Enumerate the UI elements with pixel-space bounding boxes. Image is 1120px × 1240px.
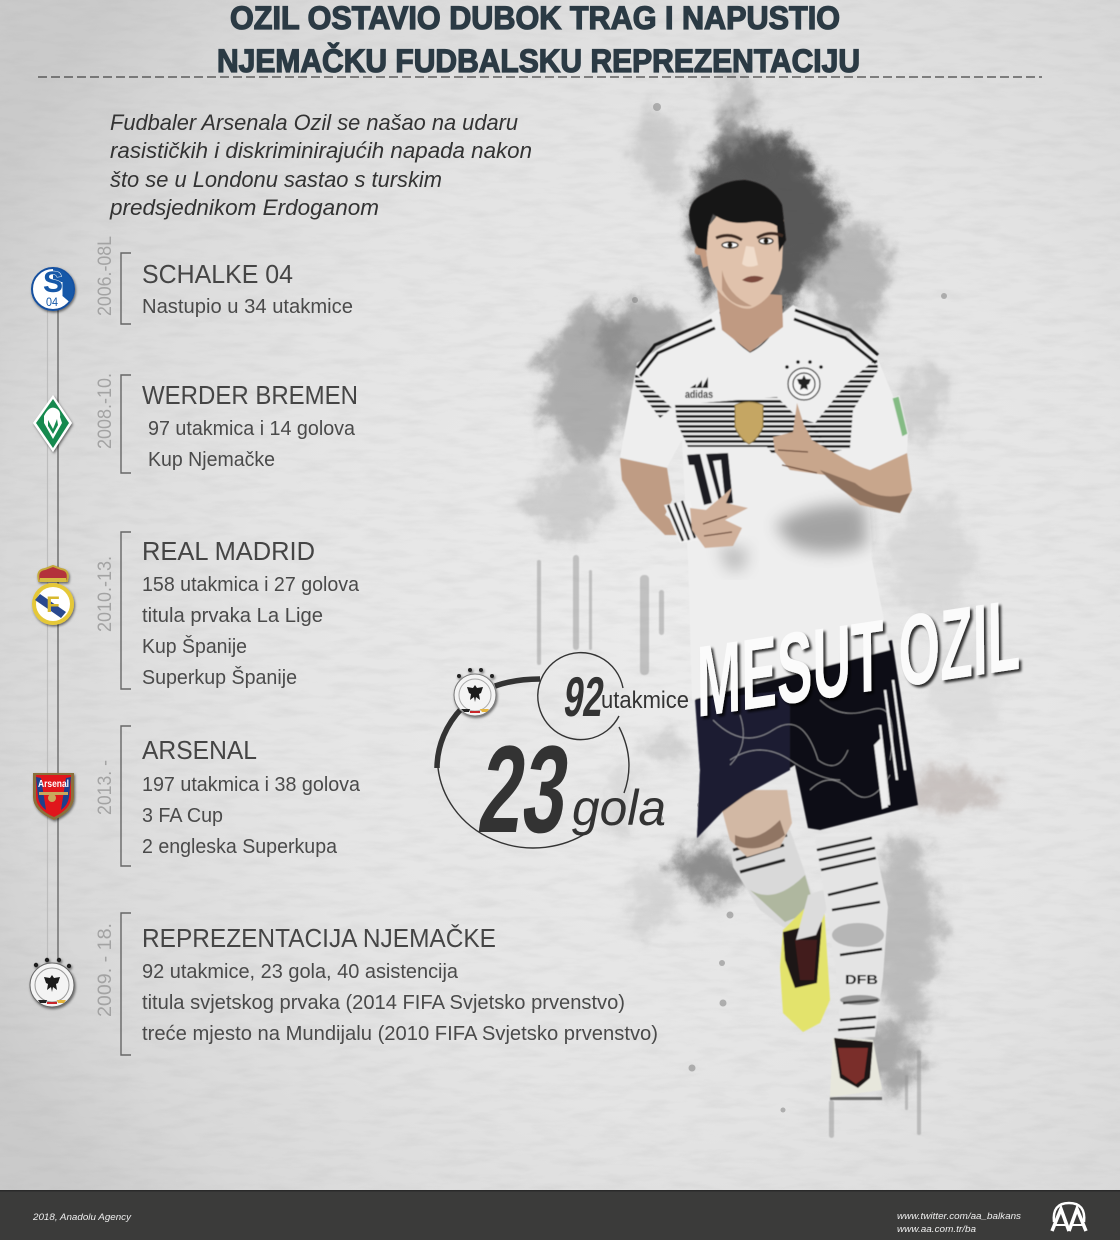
club: Werder Bremen: WERDER BREMEN bbox=[142, 380, 358, 410]
intro text: rasističkih i diskriminirajućih napada nakon bbox=[110, 138, 532, 163]
national team: Germany bbox=[95, 913, 658, 1055]
club: Real Madrid: 2010.-13. bbox=[95, 556, 116, 632]
yellow boot bbox=[780, 890, 830, 1032]
shorts bbox=[695, 640, 918, 838]
player illustration bbox=[620, 180, 918, 1100]
club: Real Madrid: Superkup Španije bbox=[142, 666, 297, 689]
club: Real Madrid: REAL MADRID bbox=[142, 536, 315, 566]
intro text: Fudbaler Arsenala Ozil se našao na udaru bbox=[110, 110, 518, 135]
club: Arsenal: ARSENAL bbox=[142, 735, 257, 765]
timeline rails bbox=[48, 300, 58, 960]
club: Real Madrid: Kup Španije bbox=[142, 635, 247, 658]
title bbox=[217, 0, 860, 79]
torso shading bbox=[718, 504, 867, 570]
left arm and wristband bbox=[620, 458, 748, 548]
icon: Arsenal crest: Arsenal bbox=[38, 779, 69, 790]
icon: Schalke 04 crest: S bbox=[43, 266, 63, 299]
intro text: što se u Londonu sastao s turskim bbox=[110, 167, 442, 192]
national team: Germany: 2009. - 18. bbox=[95, 923, 116, 1017]
title: OZIL OSTAVIO DUBOK TRAG I NAPUSTIO bbox=[230, 0, 840, 36]
club: Schalke 04: 2006.-08L bbox=[95, 236, 116, 316]
club: Schalke 04: Nastupio u 34 utakmice bbox=[142, 296, 353, 318]
23 goals: gola bbox=[572, 780, 666, 836]
club: Arsenal: 2013. - bbox=[95, 760, 116, 815]
intro text bbox=[109, 110, 532, 220]
icon: Schalke 04 crest bbox=[32, 266, 74, 310]
national team: Germany: 92 utakmice, 23 gola, 40 asistencija bbox=[142, 961, 459, 983]
national team: Germany: titula svjetskog prvaka (2014 FIFA Svjetsko prvenstvo) bbox=[142, 992, 625, 1014]
national team: Germany: treće mjesto na Mundijalu (2010 FIFA Svjetsko prvenstvo) bbox=[142, 1023, 658, 1045]
footer links bbox=[897, 1211, 1021, 1235]
national team: Germany: REPREZENTACIJA NJEMAČKE bbox=[142, 923, 496, 953]
club: Real Madrid bbox=[95, 532, 360, 689]
club: Arsenal bbox=[95, 726, 361, 866]
club: Arsenal: 197 utakmica i 38 golova bbox=[142, 774, 361, 796]
club: Werder Bremen: Kup Njemačke bbox=[148, 449, 275, 471]
icon: Arsenal crest bbox=[33, 773, 74, 820]
right arm and hand bbox=[773, 403, 912, 513]
club: Real Madrid: 158 utakmica i 27 golova bbox=[142, 574, 360, 596]
club: Werder Bremen: 2008.-10. bbox=[95, 373, 116, 449]
credit: 2018, Anadolu Agency bbox=[32, 1212, 132, 1223]
icon: Anadolu Agency logo bbox=[1052, 1203, 1086, 1231]
title: NJEMAČKU FUDBALSKU REPREZENTACIJU bbox=[217, 43, 860, 79]
92 matches bbox=[560, 665, 689, 728]
club: Schalke 04 bbox=[95, 236, 353, 324]
club: Real Madrid: titula prvaka La Lige bbox=[142, 605, 323, 627]
23 goals: 23 bbox=[472, 721, 578, 859]
watercolor splashes behind the player bbox=[532, 71, 1005, 1138]
icon: Real Madrid crest bbox=[32, 566, 74, 625]
footer links: www.aa.com.tr/ba bbox=[897, 1224, 976, 1235]
club: Arsenal: 3 FA Cup bbox=[142, 805, 223, 827]
footer bar bbox=[0, 1190, 1120, 1240]
paint drips bbox=[537, 555, 921, 1138]
icon: Werder Bremen crest bbox=[33, 395, 72, 452]
92 matches: 92 bbox=[560, 665, 608, 728]
right leg with sock bbox=[815, 837, 888, 1037]
left leg with sock bbox=[722, 790, 818, 937]
club: Werder Bremen bbox=[95, 373, 358, 473]
shirt: adidas bbox=[685, 389, 713, 401]
club: Werder Bremen: 97 utakmica i 14 golova bbox=[148, 418, 356, 440]
neck bbox=[717, 290, 783, 352]
footer links: www.twitter.com/aa_balkans bbox=[897, 1211, 1021, 1222]
intro text: predsjednikom Erdoganom bbox=[109, 195, 379, 220]
icon: German football federation crest bbox=[30, 958, 74, 1007]
stats circle: 92 matches, 23 goals bbox=[437, 653, 689, 859]
club: Schalke 04: SCHALKE 04 bbox=[142, 259, 293, 289]
club: Arsenal: 2 engleska Superkupa bbox=[142, 836, 338, 858]
shirt bbox=[620, 305, 908, 700]
right leg with sock: DFB bbox=[845, 972, 878, 987]
head and hair bbox=[689, 180, 786, 309]
icon: DFB crest bbox=[454, 668, 496, 716]
right boot bbox=[830, 1038, 882, 1100]
icon: Schalke 04 crest: 04 bbox=[46, 295, 58, 309]
icon: Real Madrid crest: F bbox=[46, 592, 60, 617]
92 matches: utakmice bbox=[601, 687, 689, 714]
